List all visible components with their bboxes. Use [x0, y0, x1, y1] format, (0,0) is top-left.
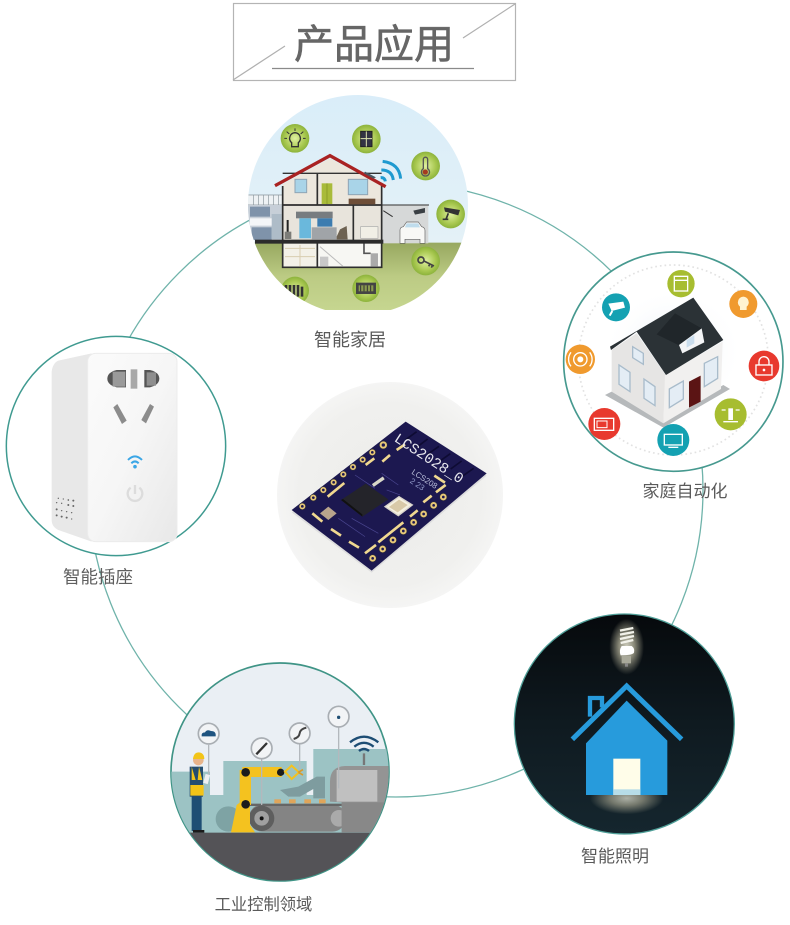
label: smart home: 智能家居 — [314, 330, 386, 350]
car — [400, 222, 425, 243]
label: smart lighting: 智能照明 — [581, 847, 649, 866]
panel: smart home — [248, 95, 468, 310]
icon: radiator badge — [282, 276, 309, 301]
icon: speaker — [566, 345, 595, 374]
icon: camera badge — [436, 200, 465, 228]
label: industrial control: 工业控制领域 — [215, 896, 312, 914]
panel: home automation — [564, 252, 783, 471]
machine — [330, 766, 392, 832]
ground — [254, 242, 462, 310]
icon: drop — [328, 706, 349, 727]
panel: smart lighting — [514, 614, 734, 834]
icon: thermometer badge — [411, 152, 440, 180]
icon stems — [209, 727, 339, 805]
house body — [283, 158, 382, 267]
icon: wifi — [381, 161, 401, 181]
connecting ring — [89, 183, 703, 797]
icon: microwave — [588, 408, 620, 440]
icon: bulb — [729, 290, 757, 318]
icon: thermostat — [715, 398, 747, 430]
ground — [190, 832, 370, 881]
icon: bulb badge — [281, 124, 309, 153]
icon: cloud — [198, 723, 219, 744]
center circle: module — [277, 382, 503, 608]
icon: key badge — [411, 247, 440, 275]
icon: wifi — [350, 737, 378, 765]
icon: oven — [667, 270, 695, 297]
icon: window badge — [352, 125, 381, 153]
PCB module — [292, 422, 487, 573]
icon: heater badge — [352, 275, 380, 302]
house — [572, 686, 682, 795]
door — [613, 759, 640, 795]
roof — [275, 156, 386, 187]
sky — [248, 95, 468, 243]
socket side — [52, 353, 92, 542]
vent dots — [56, 498, 74, 520]
icon: lock — [749, 351, 779, 381]
floor glow — [590, 782, 663, 814]
worker — [190, 752, 210, 833]
title box — [233, 4, 516, 80]
left annex — [247, 195, 283, 240]
label: smart socket: 智能插座 — [63, 567, 133, 587]
label: home automation: 家庭自动化 — [642, 482, 728, 501]
board silk text: LCS2028_0 — [391, 431, 466, 488]
socket face — [88, 353, 177, 542]
icon: glowing bulb — [609, 619, 644, 675]
garage — [382, 205, 429, 243]
icon: wrench — [251, 738, 272, 759]
icon: wifi — [128, 456, 142, 467]
PCB module: LCS208 — [410, 467, 439, 491]
icon: tv — [657, 424, 689, 456]
outlet holes — [107, 369, 159, 424]
panel: industrial control — [165, 663, 398, 886]
floor band — [255, 240, 383, 244]
icon: pipe — [289, 723, 310, 744]
icon: power — [128, 485, 142, 501]
conveyor — [249, 799, 347, 832]
panel: smart socket — [6, 336, 226, 556]
title: 产品应用 — [294, 23, 454, 67]
robot arm — [231, 766, 303, 832]
factory background — [165, 749, 392, 835]
PCB module: 2 23 — [408, 476, 427, 493]
icon: camera — [602, 293, 630, 321]
house — [605, 298, 730, 428]
machine rear — [280, 777, 325, 798]
